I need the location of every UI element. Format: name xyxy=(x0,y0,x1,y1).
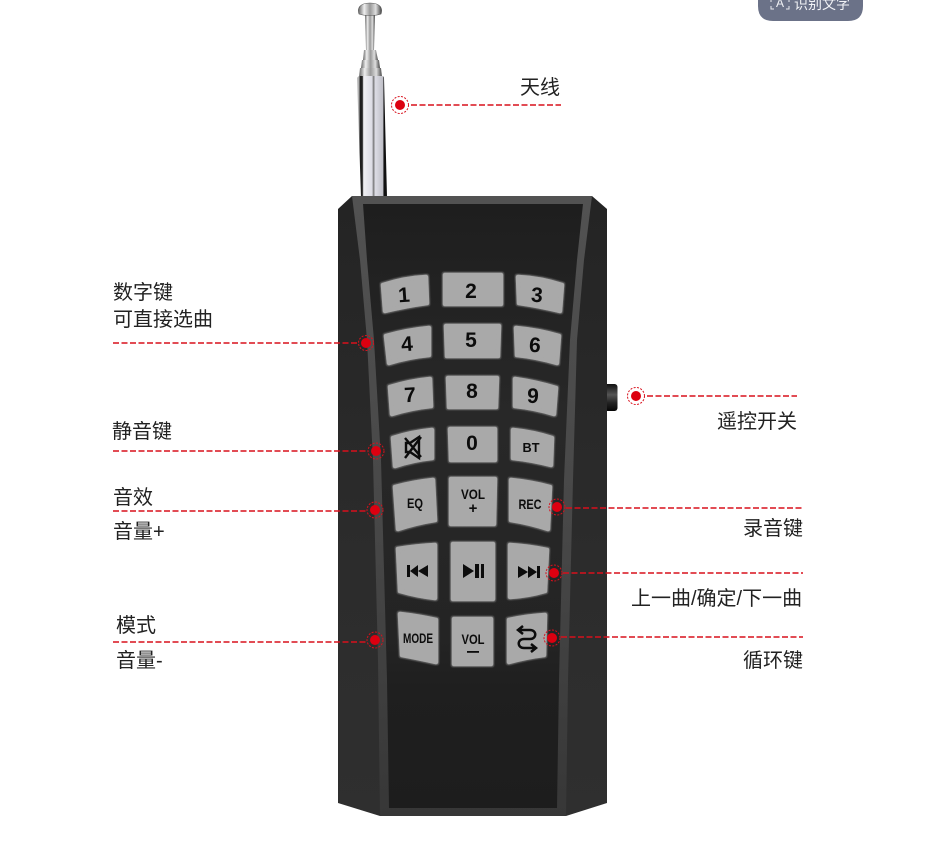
key 4: 4 xyxy=(400,333,414,356)
badge: 识别文字 xyxy=(758,0,863,21)
key MODE: MODE xyxy=(403,630,433,646)
key VOL-: VOL xyxy=(462,631,485,647)
front bezel xyxy=(352,196,592,816)
key 7: 7 xyxy=(404,384,416,407)
key 3 xyxy=(518,277,562,311)
key 1 xyxy=(383,277,427,311)
key BT xyxy=(513,430,552,465)
callout: 天线: 天线 xyxy=(520,76,560,99)
key 4 xyxy=(386,328,429,363)
key 5 xyxy=(446,326,499,356)
side switch knob xyxy=(604,384,618,411)
callout: 音效 音量+: 音量+ xyxy=(113,520,165,543)
callout: 循环键 xyxy=(544,630,803,672)
key EQ xyxy=(395,480,435,529)
antenna xyxy=(357,3,387,197)
key 9: 9 xyxy=(527,385,539,408)
key 8: 8 xyxy=(466,380,478,403)
key 1: 1 xyxy=(397,284,411,307)
key VOL+ xyxy=(451,479,495,524)
key 6 xyxy=(516,328,559,363)
remote control device xyxy=(338,196,607,816)
callout: 模式 音量-: 模式 xyxy=(116,614,156,637)
callout: 模式 音量- xyxy=(113,614,383,672)
key 2 xyxy=(445,275,501,304)
key 3: 3 xyxy=(530,284,544,307)
callout: 录音键: 录音键 xyxy=(743,517,803,540)
key 6: 6 xyxy=(528,334,542,357)
key VOL+: VOL xyxy=(461,486,485,502)
callout: 遥控开关: 遥控开关 xyxy=(717,410,797,433)
key 8 xyxy=(448,378,497,407)
callout: 循环键: 循环键 xyxy=(743,649,803,672)
callout: 数字键: 数字键 xyxy=(113,281,173,304)
key EQ: EQ xyxy=(407,495,423,511)
callout: 音效 音量+: 音效 xyxy=(113,486,153,509)
key REC xyxy=(511,480,550,529)
key BT: BT xyxy=(522,440,540,455)
callout: 上一曲/确定/下一曲 xyxy=(546,565,803,610)
key REC: REC xyxy=(518,496,542,512)
key 9 xyxy=(515,379,556,414)
key previous xyxy=(398,545,435,598)
callout: 静音键 xyxy=(112,420,384,459)
front panel xyxy=(363,204,583,808)
key 7 xyxy=(390,379,431,414)
device body xyxy=(338,196,607,816)
key 0 xyxy=(450,429,495,460)
key play/pause xyxy=(453,544,493,599)
key VOL- xyxy=(454,619,491,664)
callout: 静音键: 静音键 xyxy=(112,420,172,443)
keypad xyxy=(383,275,562,664)
key VOL+: + xyxy=(469,500,478,517)
key 0: 0 xyxy=(466,432,478,455)
key loop xyxy=(509,615,545,662)
callout: 上一曲/确定/下一曲: 上一曲/确定/下一曲 xyxy=(631,587,802,610)
key MODE xyxy=(400,614,436,662)
callout: 录音键 xyxy=(549,499,803,540)
callout: 遥控开关 xyxy=(628,388,797,433)
callout: 音效 音量+ xyxy=(113,486,383,543)
callout: 数字键 xyxy=(113,281,374,350)
key mute xyxy=(393,430,432,466)
key 2: 2 xyxy=(465,280,477,303)
callout: 模式 音量-: 音量- xyxy=(116,649,163,672)
callout: 数字键: 可直接选曲 xyxy=(113,308,213,331)
callout: 天线 xyxy=(392,76,561,114)
key 5: 5 xyxy=(465,329,477,352)
key next xyxy=(510,545,547,597)
